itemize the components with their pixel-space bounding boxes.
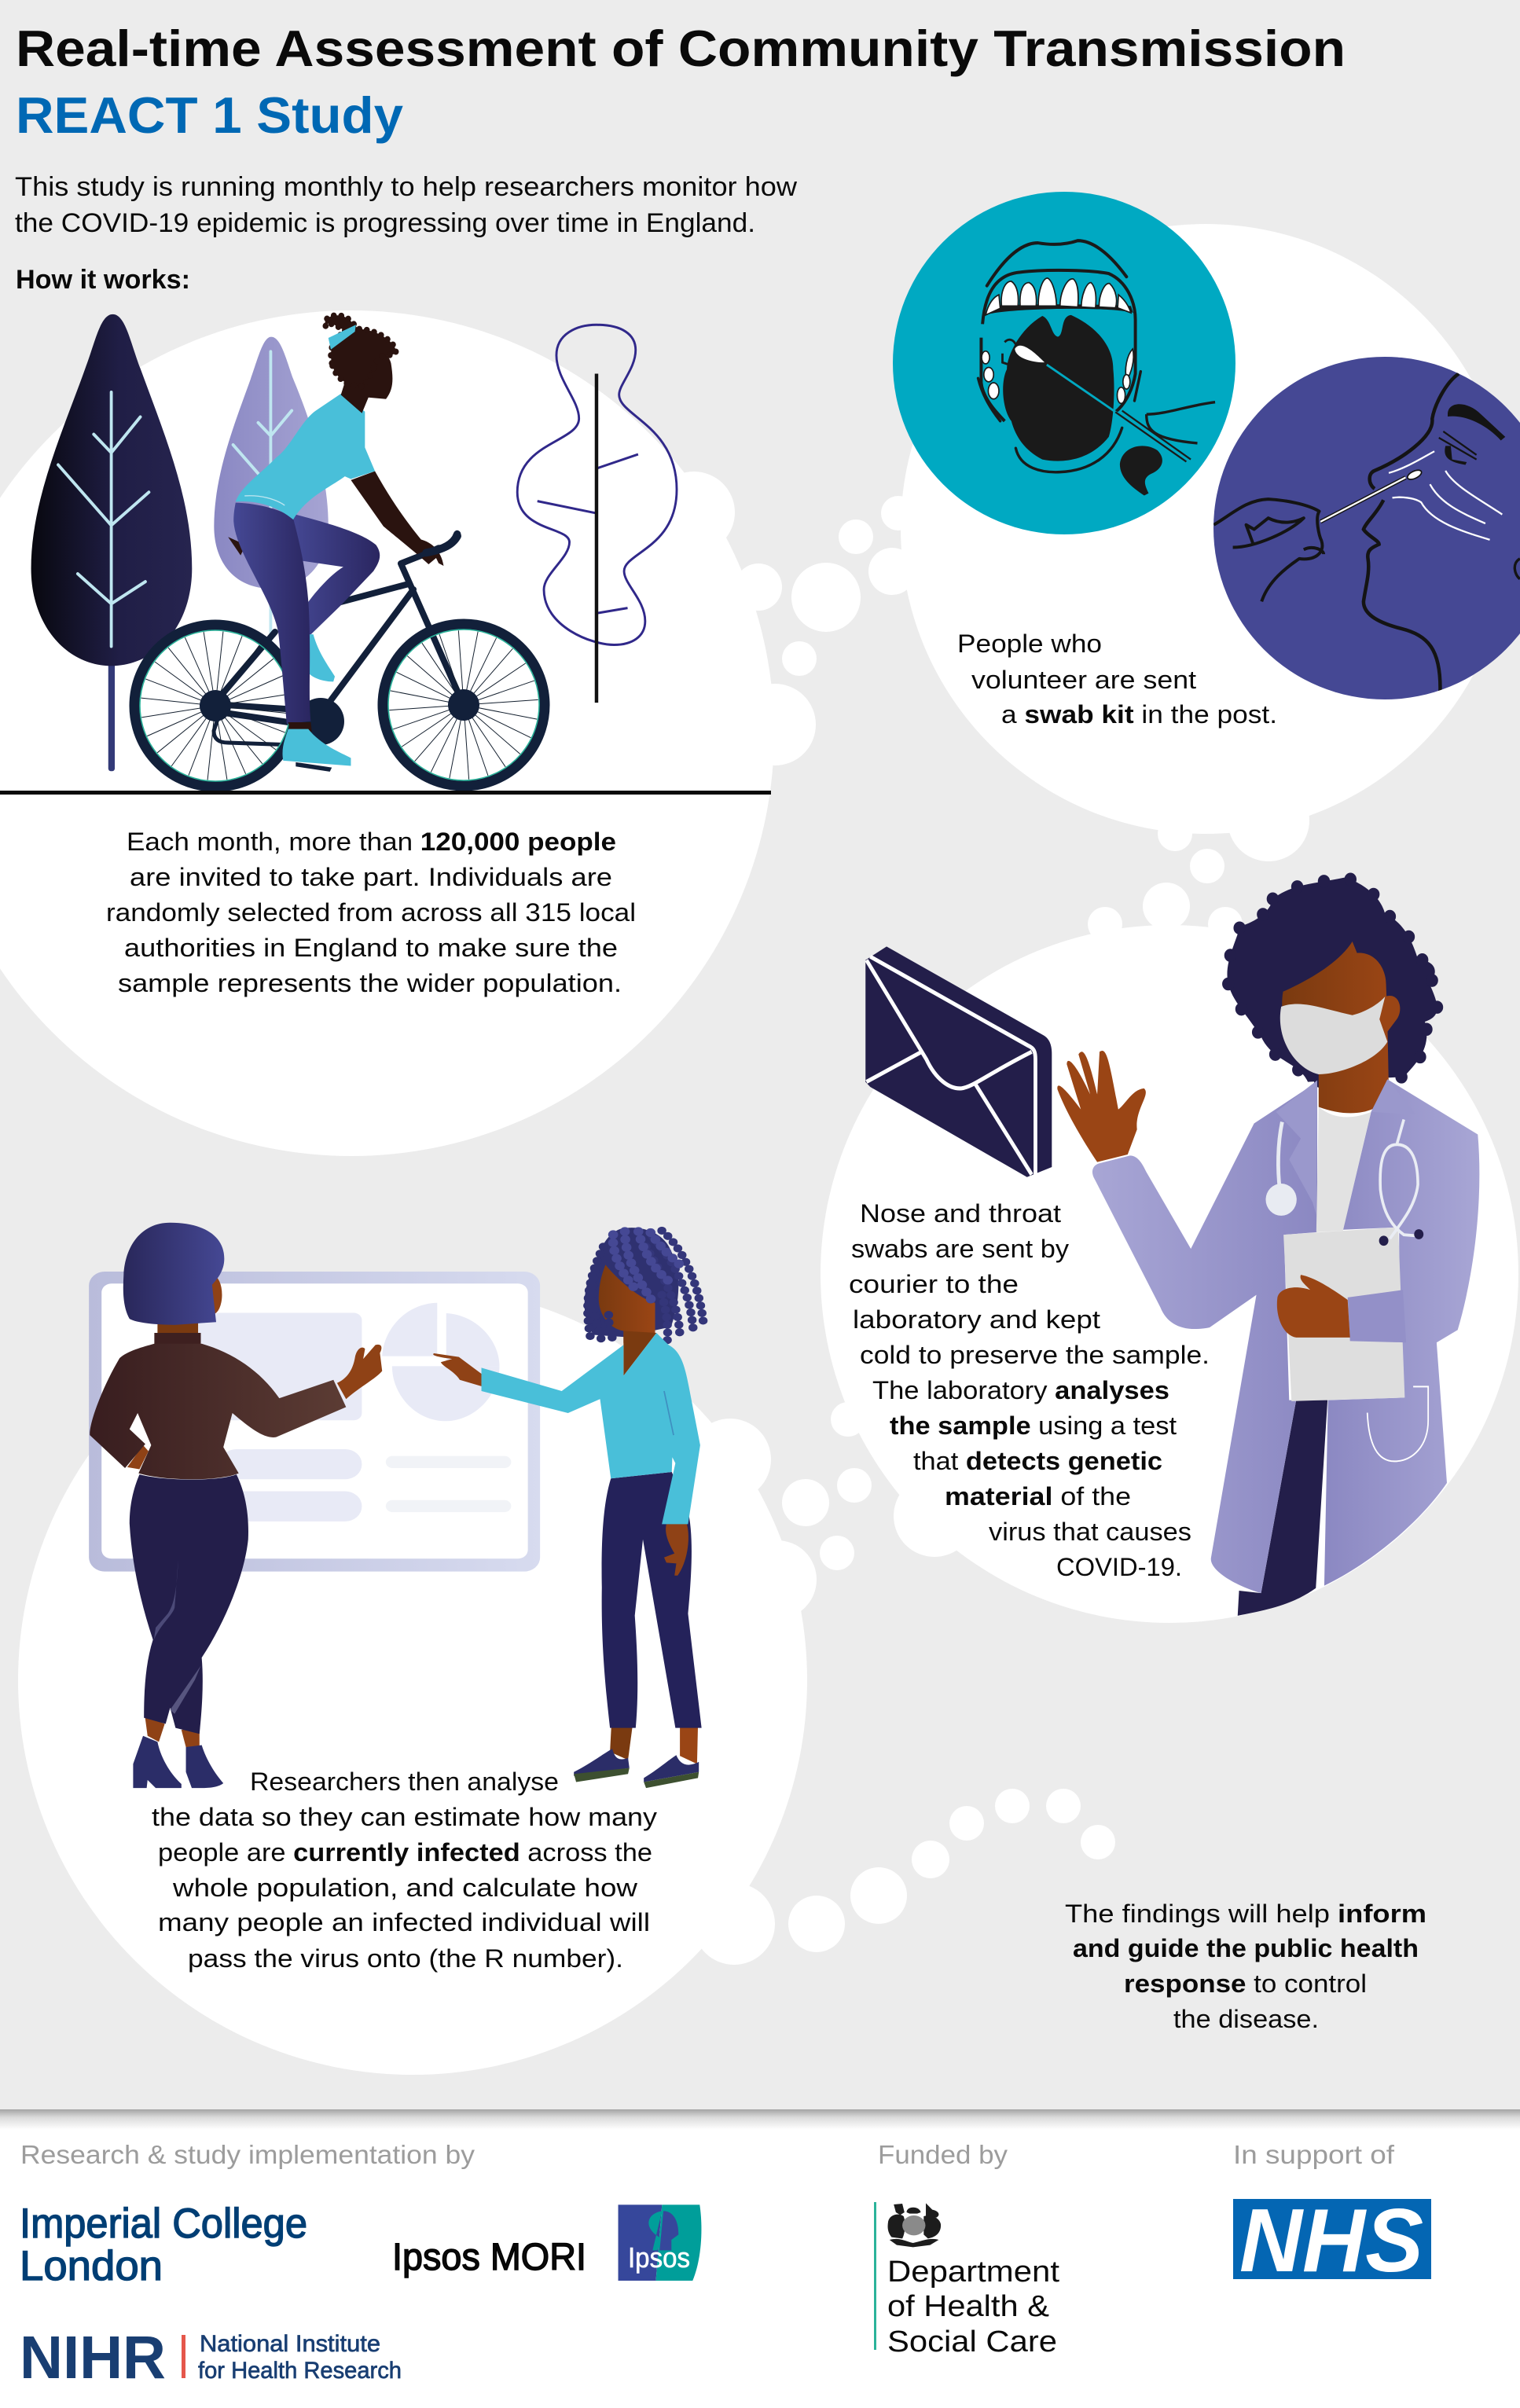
- footer heading: funded: Funded by: [878, 2140, 1008, 2169]
- text: data analysis: people are currently infected across the: [158, 1838, 652, 1867]
- icon: royal crest: [888, 2203, 941, 2247]
- text: swab kit: [957, 630, 1277, 729]
- intro text: the COVID-19 epidemic is progressing over time in England.: [15, 208, 755, 238]
- text: laboratory: cold to preserve the sample.: [860, 1341, 1210, 1369]
- text: data analysis: pass the virus onto (the R number).: [188, 1944, 623, 1973]
- text: laboratory: swabs are sent by: [851, 1235, 1069, 1263]
- text: laboratory: that detects genetic: [913, 1447, 1162, 1475]
- logo: Department of Health and Social Care: Social Care: [887, 2325, 1057, 2358]
- logo: Ipsos badge: [619, 2204, 701, 2281]
- text: recruitment: randomly selected from across all 315 local: [106, 898, 636, 927]
- icon: cyclist: [228, 315, 457, 772]
- text: laboratory: The laboratory analyses: [872, 1376, 1169, 1404]
- text: laboratory: virus that causes: [989, 1518, 1191, 1546]
- logo: Imperial College London: London: [20, 2243, 163, 2289]
- text: laboratory: COVID-19.: [1056, 1553, 1182, 1581]
- logo: Imperial College London: Imperial College: [20, 2201, 307, 2247]
- thought bubble: [868, 224, 1511, 942]
- panel: swab kit: [868, 192, 1520, 942]
- back wheel: [127, 617, 304, 795]
- text: swab kit: volunteer are sent: [971, 666, 1196, 694]
- text: laboratory: [849, 1199, 1210, 1581]
- thought bubble: [0, 310, 873, 1156]
- icon: dark tree: [31, 314, 192, 771]
- icon: envelope: [865, 946, 1052, 1177]
- text: recruitment: are invited to take part. Individuals are: [130, 863, 612, 891]
- illustration: presentation board: [89, 1272, 540, 1572]
- text: data analysis: whole population, and calculate how: [172, 1874, 638, 1902]
- text: recruitment: Each month, more than 120,000 people: [127, 828, 616, 856]
- text: recruitment: [106, 828, 636, 997]
- text: laboratory: the sample using a test: [890, 1411, 1177, 1440]
- panel: laboratory: [782, 877, 1518, 1623]
- logo: NIHR: for Health Research: [198, 2358, 402, 2384]
- logo: NIHR: NIHR: [20, 2324, 166, 2391]
- intro text: This study is running monthly to help researchers monitor how: [15, 172, 797, 202]
- text: data analysis: the data so they can estimate how many: [152, 1803, 657, 1831]
- text: laboratory: material of the: [945, 1482, 1131, 1511]
- panel: recruitment: [0, 310, 873, 1156]
- logo: NIHR: [20, 2324, 402, 2391]
- text: data analysis: [152, 1767, 657, 1973]
- text: findings: The findings will help inform: [1065, 1900, 1426, 1928]
- illustration: woman with curly hair: [433, 1228, 703, 1788]
- text: swab kit: a swab kit in the post.: [1001, 700, 1277, 729]
- illustration: doctor: [1057, 877, 1479, 1616]
- text: swab kit: People who: [957, 630, 1102, 658]
- text: recruitment: sample represents the wider population.: [118, 969, 622, 997]
- logo: Ipsos badge: Ipsos: [628, 2241, 690, 2274]
- logo: NHS: NHS: [1239, 2191, 1423, 2291]
- text: findings: response to control: [1124, 1969, 1367, 1998]
- footer heading: support: In support of: [1233, 2140, 1395, 2169]
- ground line: [0, 791, 771, 795]
- icon: outline tree: [517, 325, 677, 703]
- icon: bicycle: [127, 536, 550, 795]
- text: findings: [1065, 1900, 1426, 2033]
- logo: Department of Health and Social Care: [874, 2202, 1059, 2358]
- logo: Department of Health and Social Care: of Health &: [887, 2290, 1049, 2323]
- text: laboratory: laboratory and kept: [853, 1305, 1100, 1334]
- icon: purple tree: [214, 337, 329, 653]
- intro text: [15, 172, 797, 238]
- subtitle: REACT 1 Study: [16, 86, 403, 144]
- illustration: trees and cyclist: [31, 314, 677, 795]
- title: Real-time Assessment of Community Transmission: [16, 20, 1346, 77]
- panel: data analysis: [18, 1223, 1115, 2075]
- logo: Department of Health and Social Care: Department: [887, 2256, 1059, 2289]
- footer heading: research: Research & study implementation by: [20, 2140, 475, 2169]
- icon: throat swab circle: [893, 192, 1235, 534]
- how it works heading: How it works:: [16, 265, 190, 295]
- front wheel: [377, 619, 550, 791]
- text: findings: the disease.: [1173, 2005, 1319, 2033]
- logo: Ipsos MORI wordmark: Ipsos MORI: [392, 2237, 586, 2278]
- text: data analysis: Researchers then analyse: [250, 1767, 559, 1796]
- thought bubble: [782, 925, 1518, 1623]
- text: laboratory: Nose and throat: [860, 1199, 1061, 1228]
- text: findings: and guide the public health: [1073, 1934, 1419, 1962]
- panel: footer: [0, 2109, 1520, 2408]
- illustration: woman with bob: [90, 1223, 382, 1788]
- logo: NIHR: National Institute: [200, 2331, 380, 2357]
- logo: Imperial College London: [20, 2201, 307, 2289]
- text: recruitment: authorities in England to make sure the: [124, 934, 618, 962]
- text: data analysis: many people an infected individual will: [158, 1908, 650, 1936]
- text: laboratory: courier to the: [849, 1270, 1019, 1298]
- thought bubble: [18, 1286, 1115, 2075]
- icon: nose swab circle: [1213, 357, 1520, 699]
